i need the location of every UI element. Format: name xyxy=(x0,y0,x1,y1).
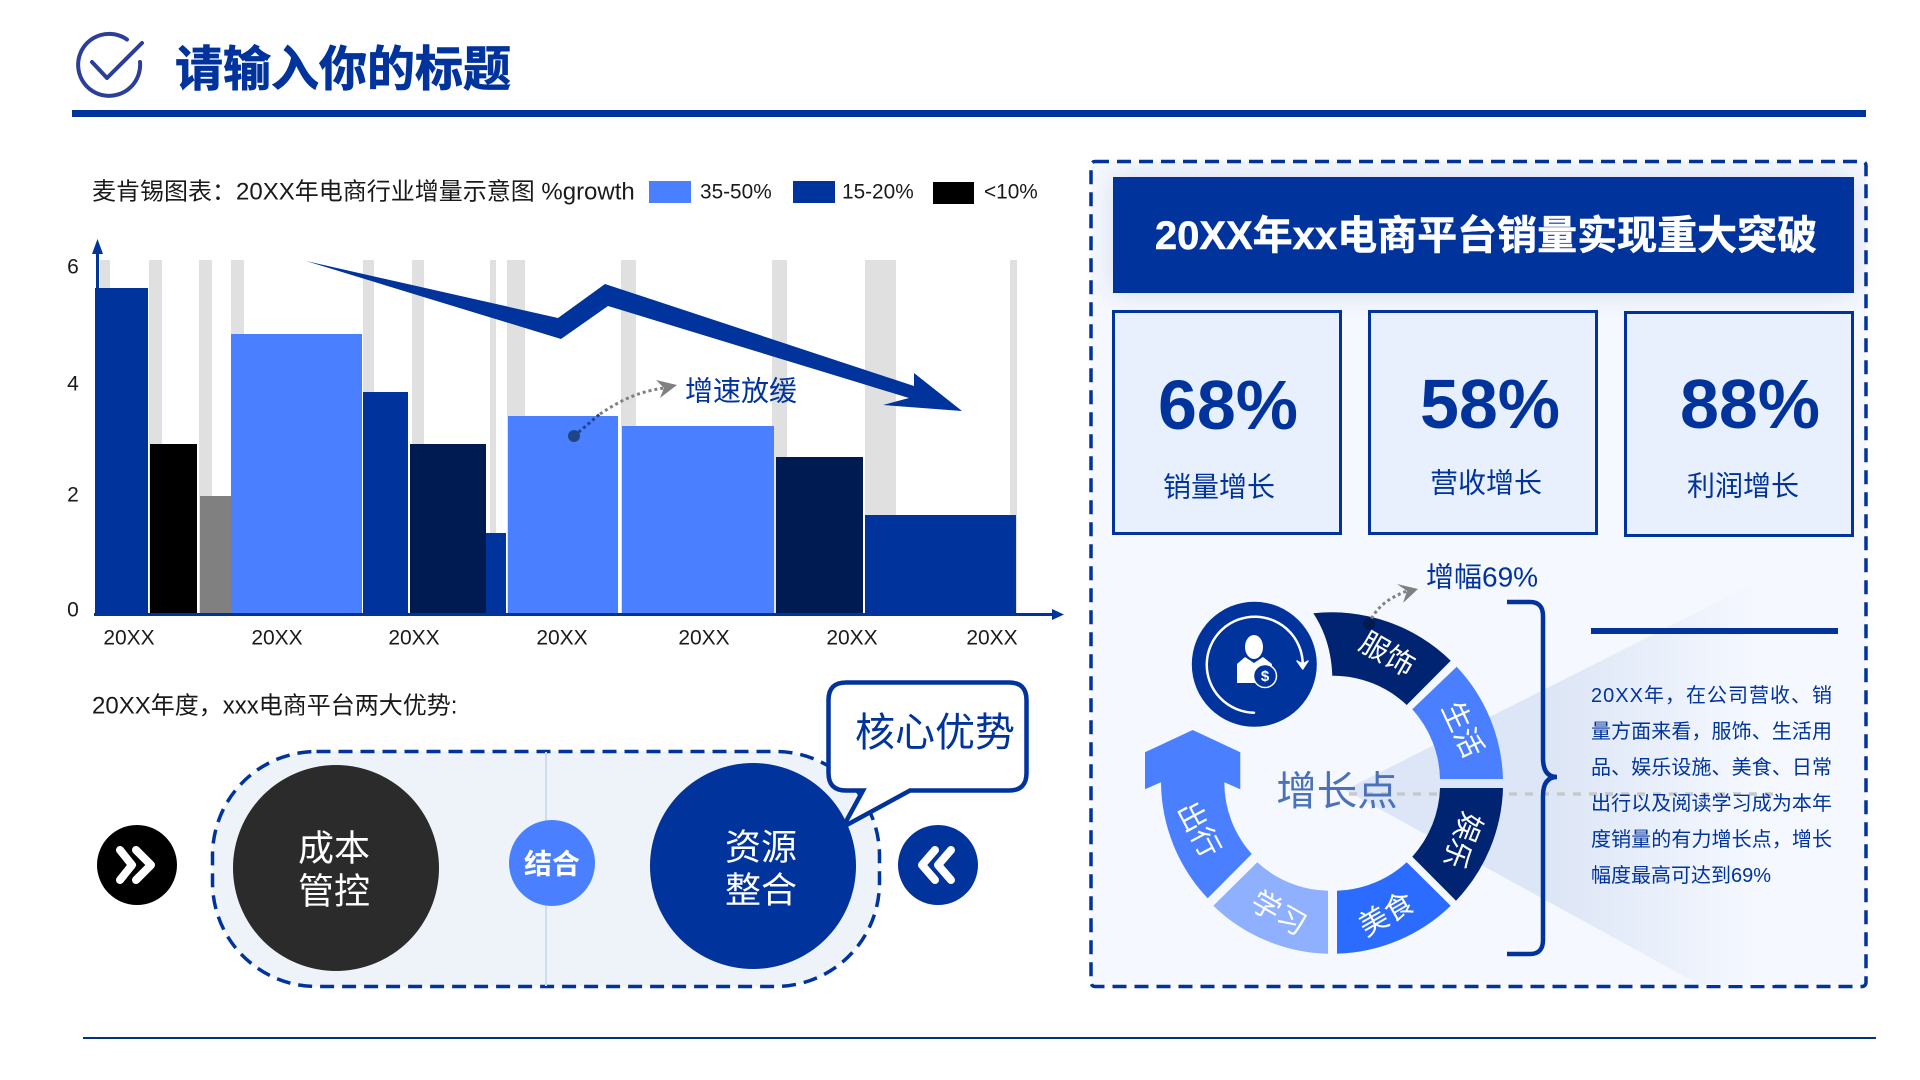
chart grey columns xyxy=(100,260,1017,614)
description text: 幅度最高可达到69% xyxy=(1591,864,1771,887)
advantages heading: 20XX年度，xxx电商平台两大优势: xyxy=(92,692,457,720)
icon: title check mark xyxy=(78,34,142,96)
chart axis labels: 20XX xyxy=(826,626,878,650)
description text xyxy=(1591,684,1832,887)
segment: living: 生活 xyxy=(1435,697,1489,763)
banner heading xyxy=(1113,177,1854,293)
description text: 量方面来看，服饰、生活用 xyxy=(1591,720,1832,743)
segment: study: 学习 xyxy=(1245,885,1312,942)
dashed guide line xyxy=(1349,792,1775,796)
chart axis labels: 20XX xyxy=(251,626,303,650)
segment: travel arrow: 出行 xyxy=(1170,796,1227,863)
icon: customer with dollar coin xyxy=(1192,602,1317,727)
title: 请输入你的标题 xyxy=(175,44,511,96)
chart axis labels: 20XX xyxy=(388,626,440,650)
donut chart: growth segments xyxy=(1145,612,1503,954)
chart axis labels: 4 xyxy=(67,372,79,396)
chart heading and legend: 35-50% xyxy=(700,180,772,204)
chart axes xyxy=(92,239,1064,620)
icon: left chevrons xyxy=(898,825,978,905)
description text: 度销量的有力增长点，增长 xyxy=(1591,828,1832,851)
annotation: increase 69% xyxy=(1363,562,1538,630)
circle: cost control: 管控 xyxy=(298,870,370,912)
segment: entertainment xyxy=(1412,788,1503,901)
segment: food xyxy=(1337,862,1451,954)
panel: advantages pill xyxy=(212,752,880,986)
circle: cost control: 成本 xyxy=(298,828,370,868)
banner heading: 20XX年xx电商平台销量实现重大突破 xyxy=(1155,214,1817,258)
card: profit growth xyxy=(1626,312,1852,536)
chart axis labels: 20XX xyxy=(966,626,1018,650)
segment: food: 美食 xyxy=(1353,886,1420,943)
text rule xyxy=(1591,628,1838,634)
circle: cost control xyxy=(233,765,439,971)
circle: combine xyxy=(509,820,595,906)
segment: living xyxy=(1412,667,1503,779)
chart heading and legend xyxy=(92,178,1038,206)
circle: resource integration: 资源 xyxy=(725,826,797,868)
card: profit growth: 88% xyxy=(1680,365,1820,443)
chart axis labels: 20XX xyxy=(536,626,588,650)
growth point label: 增长点 xyxy=(1276,768,1398,814)
card: revenue growth: 营收增长 xyxy=(1430,468,1542,498)
circle: combine: 结合 xyxy=(524,848,580,880)
brace xyxy=(1507,602,1557,954)
card: sales growth xyxy=(1114,312,1340,534)
chart axis labels: 6 xyxy=(67,256,79,278)
card: sales growth: 68% xyxy=(1158,366,1298,444)
chart heading and legend: 麦肯锡图表：20XX年电商行业增量示意图 %growth xyxy=(92,178,635,206)
icon: customer with dollar coin: $ xyxy=(1261,668,1270,685)
chart axis labels xyxy=(67,256,1018,650)
chart bars xyxy=(95,288,1016,614)
circle: resource integration: 整合 xyxy=(725,870,797,910)
segment: travel arrow xyxy=(1145,730,1252,898)
cone highlight behind donut xyxy=(1345,573,1775,985)
description text: 出行以及阅读学习成为本年 xyxy=(1591,792,1832,815)
chart axis labels: 20XX xyxy=(678,626,730,650)
annotation: growth slowing: 增速放缓 xyxy=(685,376,797,406)
chart axis labels: 0 xyxy=(67,598,79,622)
panel: right dashed container xyxy=(1091,162,1866,986)
header rule xyxy=(72,110,1866,117)
chart heading and legend: 15-20% xyxy=(842,180,914,204)
annotation: increase 69%: 增幅69% xyxy=(1426,562,1538,592)
description text: 品、娱乐设施、美食、日常 xyxy=(1591,756,1832,779)
chart heading and legend: <10% xyxy=(984,180,1038,204)
segment: clothing: 服饰 xyxy=(1354,626,1420,683)
segment: study xyxy=(1213,862,1328,954)
annotation: growth slowing xyxy=(568,376,797,442)
segment: clothing xyxy=(1313,612,1451,705)
callout: core advantage xyxy=(828,682,1026,827)
description text: 20XX年，在公司营收、销 xyxy=(1591,684,1832,707)
circle: resource integration xyxy=(650,763,856,969)
card: revenue growth xyxy=(1370,312,1596,534)
card: sales growth: 销量增长 xyxy=(1163,472,1275,502)
footer rule xyxy=(83,1037,1876,1039)
segment: entertainment: 娱乐 xyxy=(1436,807,1488,873)
banner shadow xyxy=(1113,177,1854,293)
callout: core advantage: 核心优势 xyxy=(855,711,1015,755)
arrow: declining growth trend xyxy=(306,261,962,411)
marimekko chart xyxy=(67,239,1064,650)
card: profit growth: 利润增长 xyxy=(1687,470,1799,502)
card: revenue growth: 58% xyxy=(1420,365,1560,443)
icon: right chevrons xyxy=(97,825,177,905)
chart axis labels: 2 xyxy=(67,484,79,506)
chart axis labels: 20XX xyxy=(103,626,155,650)
